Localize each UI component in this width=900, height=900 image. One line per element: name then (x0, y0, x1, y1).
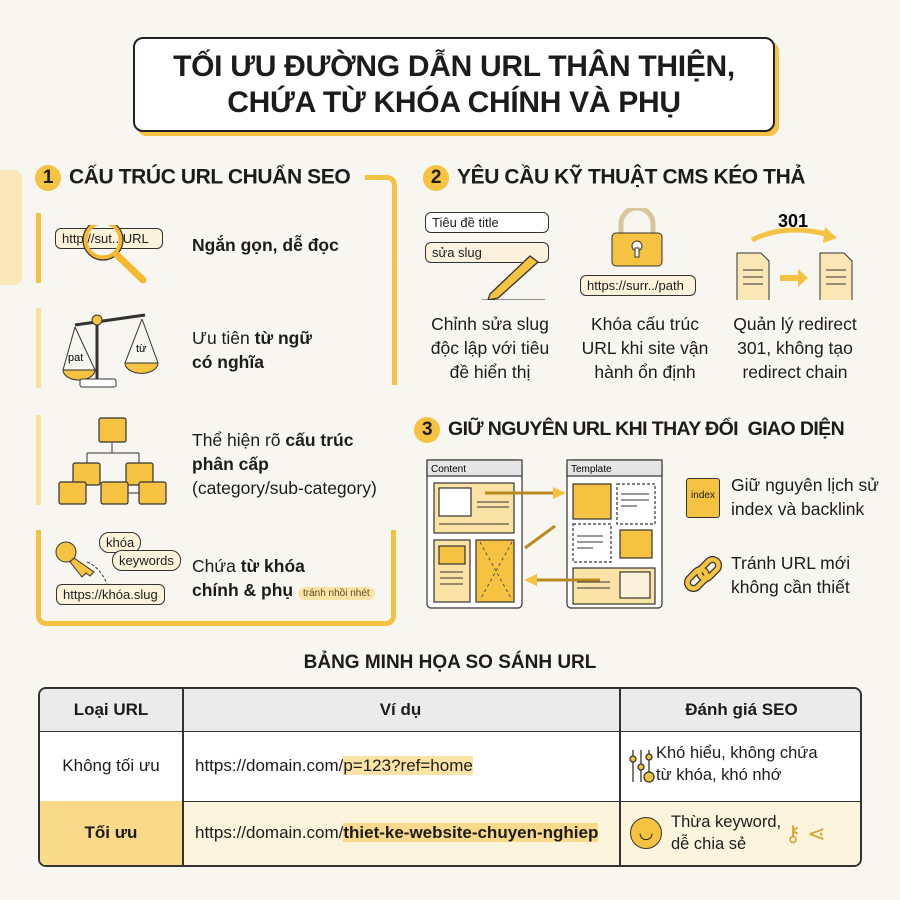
CMS col 2 icon: lock (580, 208, 696, 296)
section 1 heading: 1 (43, 167, 53, 188)
item 1: magnifier URL: http://sut...URL (62, 231, 149, 246)
item 3 text: phân cấp (192, 454, 269, 474)
comparison table: Loại URL (74, 700, 148, 719)
item 4: key and keyword pills: keywords (119, 553, 174, 568)
CMS col 2 icon: lock: https://surr../path (587, 278, 684, 293)
section 1 bracket (365, 175, 397, 385)
CMS col 3 text: redirect chain (742, 362, 848, 382)
comparison table (38, 687, 862, 867)
CMS col 1 text: Chỉnh sửa slug (431, 314, 549, 334)
icon: index book: index (691, 490, 715, 501)
item 3 text: (category/sub-category) (192, 478, 377, 498)
item 4 text (192, 556, 375, 600)
section 1 heading: CẤU TRÚC URL CHUẨN SEO (69, 166, 350, 189)
text: avoid new URL: Tránh URL mới (731, 553, 850, 573)
CMS col 1 text (431, 314, 549, 382)
comparison table: Đánh giá SEO (685, 700, 798, 719)
CMS col 1 icon: slug fields + pencil: Tiêu đề title (432, 215, 499, 230)
text: index history: Giữ nguyên lịch sử (731, 475, 879, 495)
item 2: scale icon: từ (136, 343, 147, 355)
layout diagram: content to template: Template (571, 464, 612, 475)
comparison table: Tối ưu (85, 823, 137, 842)
item 4 text: Chứa từ khóa (192, 556, 305, 576)
CMS col 2 text: Khóa cấu trúc (591, 314, 699, 334)
item 4 text: chính & phụ tránh nhồi nhét (192, 580, 370, 600)
text: index history: index và backlink (731, 499, 864, 519)
item 1: magnifier URL (55, 225, 163, 284)
item 4: key and keyword pills (56, 532, 181, 605)
item 1 text: Ngắn gọn, dễ đọc (192, 235, 339, 255)
text: avoid new URL (731, 553, 850, 597)
section 3 heading: 3 (422, 419, 432, 440)
text: avoid new URL: không cần thiết (731, 577, 850, 597)
CMS col 3 text: 301, không tạo (737, 338, 853, 358)
section 2 heading: YÊU CẦU KỸ THUẬT CMS KÉO THẢ (457, 166, 805, 189)
comparison table: từ khóa, khó nhớ (656, 766, 782, 784)
CMS col 1 icon: slug fields + pencil: sửa slug (432, 245, 482, 260)
icon: chain link (684, 556, 722, 592)
CMS col 1 text: độc lập với tiêu (431, 338, 549, 358)
item 2 text: Ưu tiên từ ngữ (192, 328, 312, 348)
layout diagram: content to template: Content (431, 464, 466, 475)
title (133, 37, 775, 132)
CMS col 3 text (733, 314, 857, 382)
comparison table: dễ chia sẻ (671, 835, 746, 853)
icon: index book (686, 478, 720, 518)
comparison table: Ví dụ (380, 700, 421, 719)
CMS col 2 text: URL khi site vận (582, 338, 708, 358)
title: CHỨA TỪ KHÓA CHÍNH VÀ PHỤ (227, 86, 681, 119)
title: TỐI ƯU ĐƯỜNG DẪN URL THÂN THIỆN, (173, 50, 735, 83)
item 2 text (192, 328, 312, 372)
CMS col 3 text: Quản lý redirect (733, 314, 857, 334)
item 4: key and keyword pills: https://khóa.slug (63, 587, 158, 602)
text: index history (731, 475, 879, 519)
comparison table: Thừa keyword, (671, 813, 781, 831)
item 3 text (192, 430, 377, 498)
comparison table: https://domain.com/p=123?ref=home (195, 756, 473, 775)
CMS col 3 icon: redirect 301 (736, 211, 852, 300)
CMS col 2 text: hành ổn định (594, 362, 696, 382)
comparison table: ◡ (639, 823, 653, 842)
item 2: scale icon (62, 314, 158, 388)
decorative left strip (0, 170, 22, 285)
comparison table: ⚷ ⋖ (785, 821, 826, 846)
item 4: key and keyword pills: khóa (106, 535, 134, 550)
item 2 text: có nghĩa (192, 352, 264, 372)
CMS col 3 icon: redirect 301: 301 (778, 211, 808, 231)
section 2 heading: 2 (431, 167, 441, 188)
comparison table: Khó hiểu, không chứa (656, 744, 818, 762)
comparison table: https://domain.com/thiet-ke-website-chuyen-nghiep (195, 823, 598, 842)
CMS col 1 icon: slug fields + pencil (425, 212, 549, 300)
section 3 heading: GIỮ NGUYÊN URL KHI THAY ĐỔI GIAO DIỆN (448, 418, 844, 440)
comparison table: Không tối ưu (62, 756, 160, 775)
layout diagram: content to template (426, 459, 663, 609)
table title: BẢNG MINH HỌA SO SÁNH URL (304, 652, 596, 673)
item 2: scale icon: pat (68, 352, 83, 364)
CMS col 1 text: đề hiển thị (450, 362, 530, 382)
item 3: folder tree (58, 417, 167, 505)
item 3 text: Thể hiện rõ cấu trúc (192, 430, 353, 450)
CMS col 2 text (582, 314, 708, 382)
